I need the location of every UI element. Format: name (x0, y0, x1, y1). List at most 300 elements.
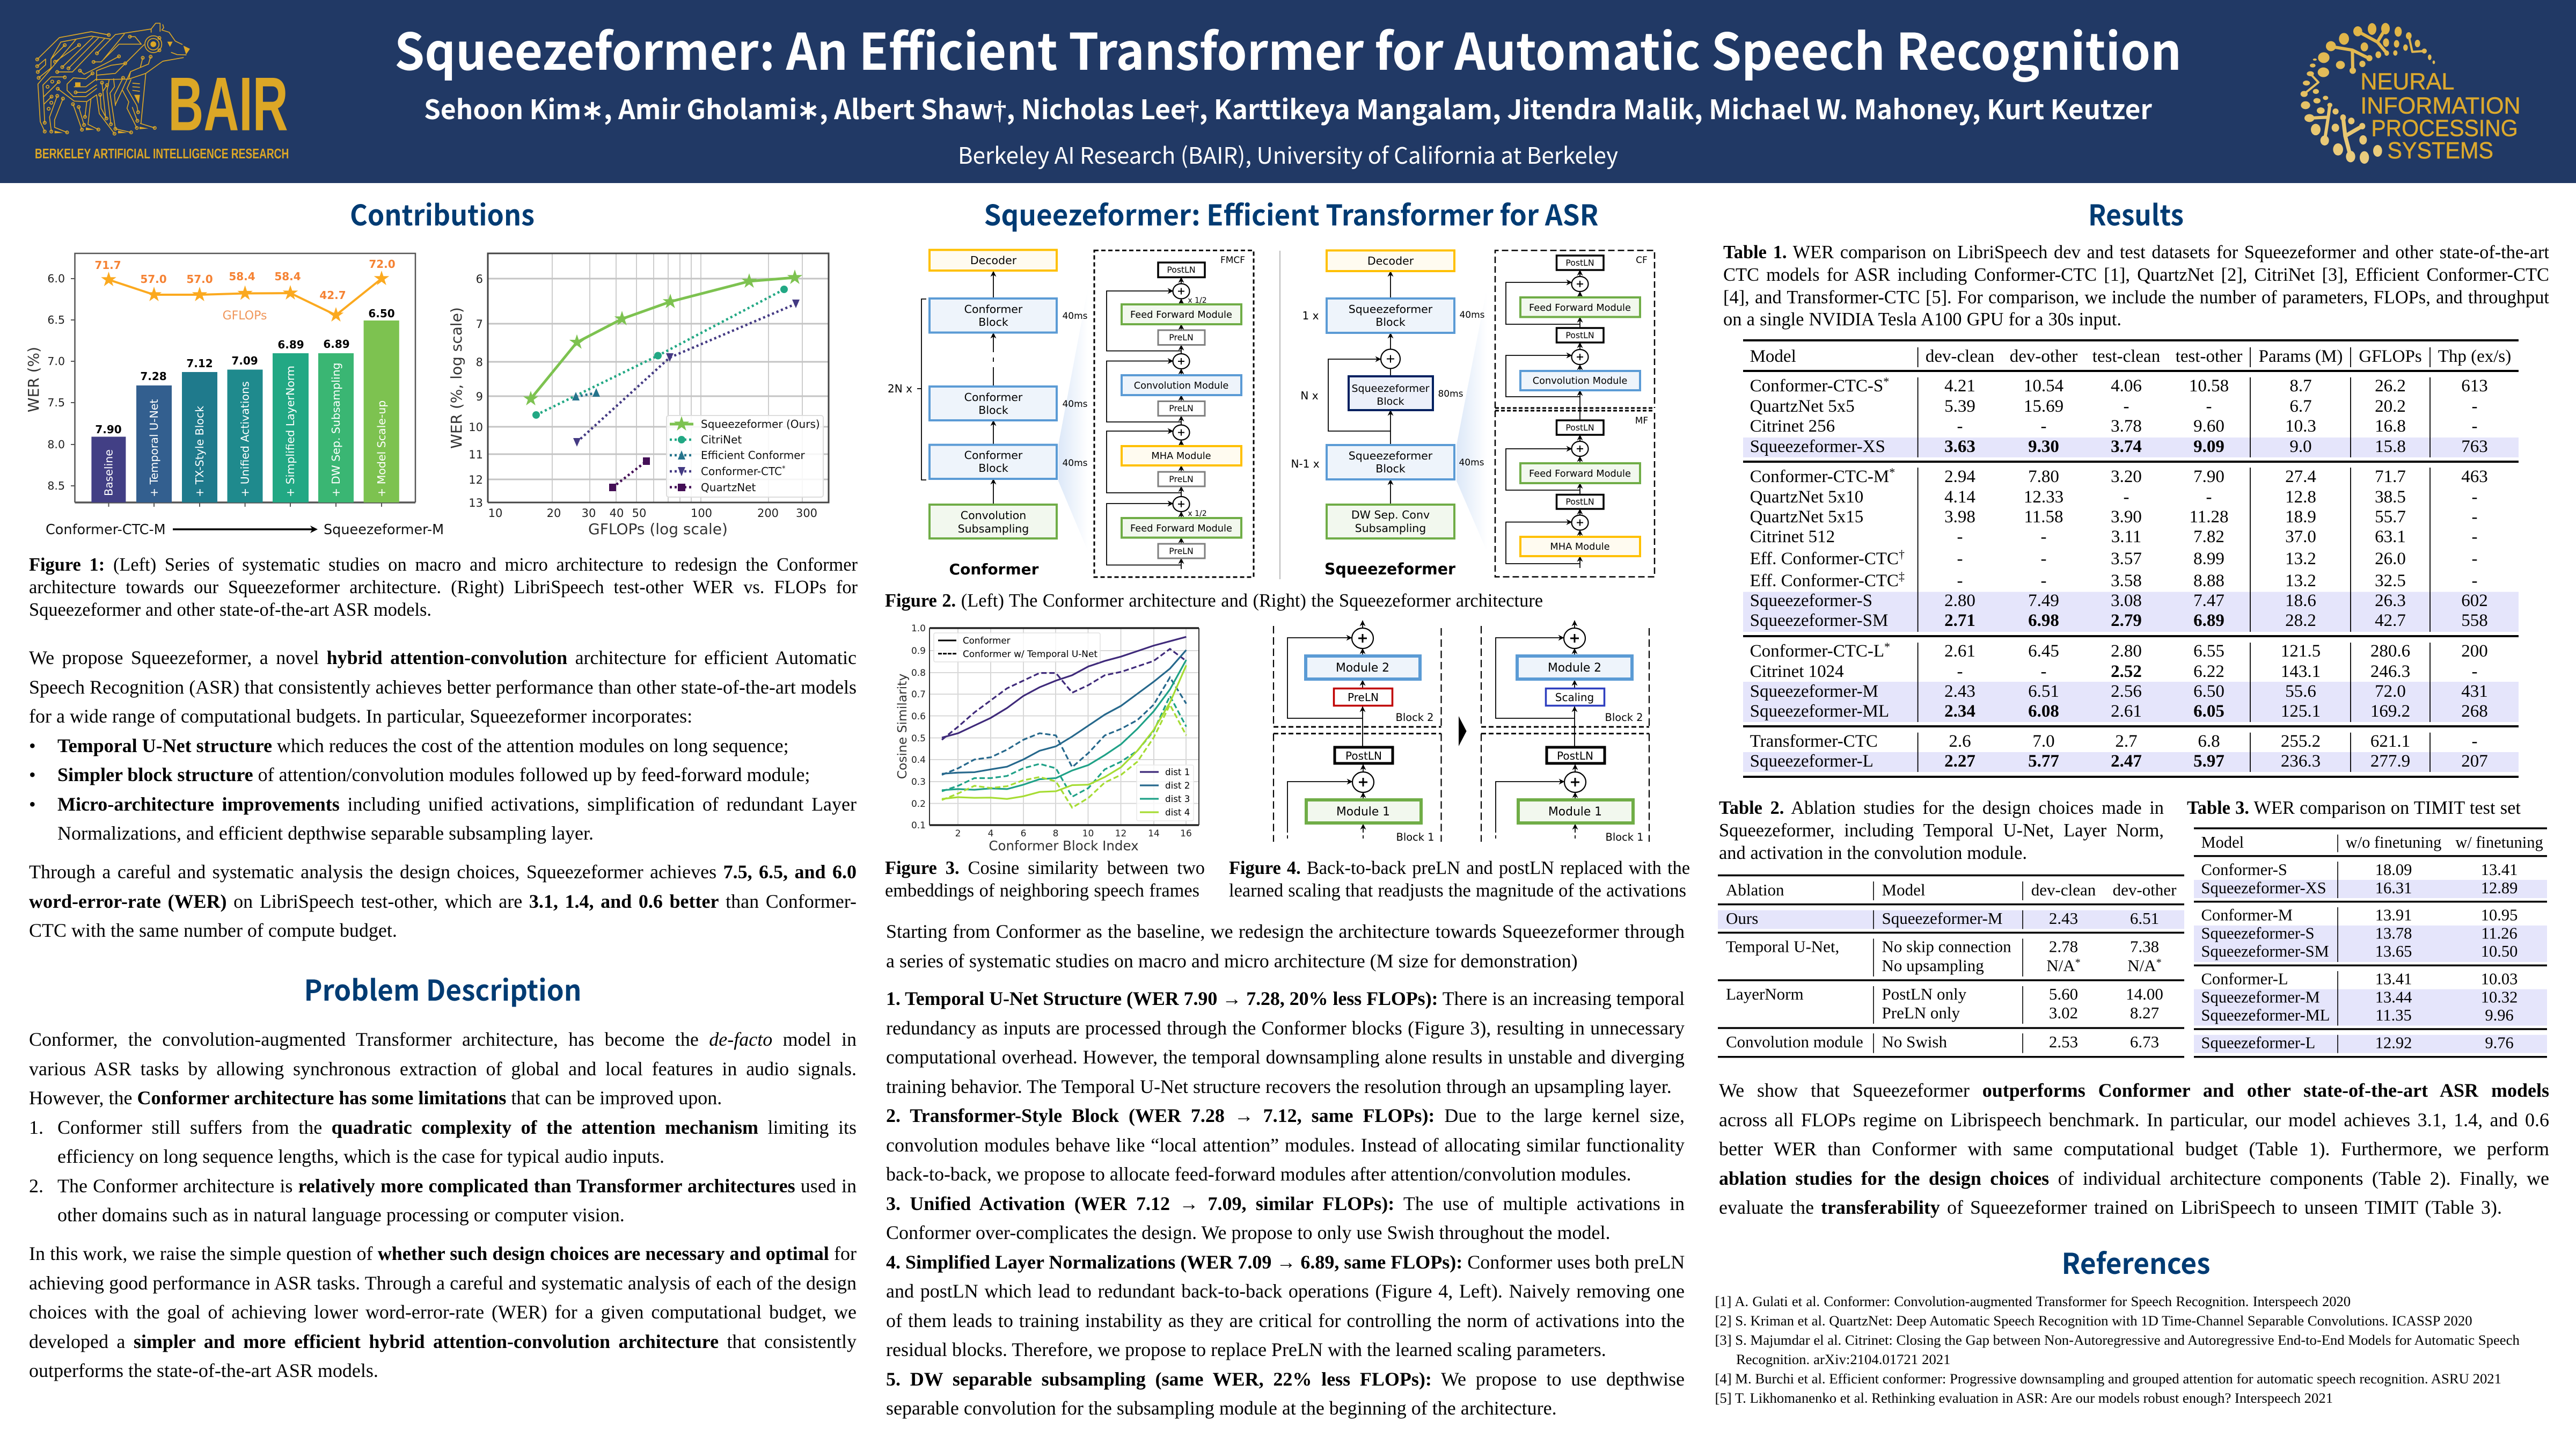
bar chart: systematic studies: 6.5 (47, 314, 65, 326)
table 2 cells: Temporal U-Net, (1726, 937, 1839, 956)
right variant: Scaling (1555, 691, 1594, 704)
table 2 cells: dev-other (2113, 880, 2177, 899)
scatter chart: WER vs GFLOPs: 8 (476, 356, 483, 369)
table 1 section L: Squeezeformer-M (1750, 682, 1878, 701)
figure 1 caption (29, 555, 858, 620)
table 3 cells: 13.78 (2375, 924, 2412, 943)
references list (1715, 1292, 2519, 1408)
text: five design steps: and postLN which lead to redundant back-to-back operations (Figure 4, Left). Naively removing one (886, 1280, 1685, 1302)
text: research question: developed a simpler and more efficient hybrid attention-convolution architecture that consistently (29, 1330, 857, 1352)
outer squeezeformer stack: Block (1377, 396, 1404, 407)
FMCF block detail: x 1/2 (1188, 509, 1207, 518)
transition triangle (1459, 716, 1467, 746)
line chart: cosine similarity: Cosine Similarity (895, 674, 910, 779)
table 3 cells: 10.95 (2481, 906, 2518, 924)
outer conformer stack: 40ms (1062, 458, 1088, 469)
legend: distance (1137, 765, 1194, 821)
table 1 section M: 7.47 (2193, 591, 2224, 610)
scatter chart: WER vs GFLOPs: 300 (796, 507, 817, 520)
table 1 section L: 246.3 (2370, 662, 2410, 681)
logo: BAIR bear (35, 23, 289, 162)
table 1 caption: on a single NVIDIA Tesla A100 GPU for a 30s input. (1723, 309, 2121, 330)
bar chart: systematic studies: 6.89 (277, 338, 304, 351)
line chart: cosine similarity: 0.3 (911, 777, 926, 788)
table 3 cells: w/o finetuning (2346, 833, 2441, 851)
table 1 section M: 6.98 (2028, 611, 2059, 630)
text: proposal and bullets: • (29, 793, 36, 815)
line chart: cosine similarity: 14 (1148, 828, 1160, 839)
table 1 section S: 5.39 (1944, 397, 1975, 416)
table 1 section S: - (2040, 417, 2047, 436)
table 1 section M: 463 (2461, 467, 2488, 486)
table 2 cells: Model (1882, 880, 1925, 899)
table 1 header: GFLOPs (2359, 347, 2422, 366)
table 1 section L: 169.2 (2370, 702, 2410, 721)
text: redesign intro (886, 917, 1685, 975)
table 3 cells: 18.09 (2375, 861, 2412, 879)
text: redesign intro: a series of systematic studies on macro and micro architecture (M size for demonstration) (886, 950, 1578, 972)
outer squeezeformer stack: Squeezeformer (1349, 303, 1433, 316)
FMCF block detail: PreLN (1169, 332, 1194, 342)
table 1 section M: - (1957, 549, 1963, 569)
scatter chart: WER vs GFLOPs: 10 (469, 421, 483, 434)
FMCF block detail: x 1/2 (1188, 296, 1207, 305)
series: QuartzNet (609, 457, 650, 491)
FMCF block detail: PreLN (1169, 474, 1194, 484)
legend: * (782, 465, 786, 473)
legend: Squeezeformer (Ours) (701, 418, 820, 431)
references list: Recognition. arXiv:2104.01721 2021 (1736, 1351, 1950, 1367)
scatter chart: WER vs GFLOPs (448, 252, 830, 538)
table 1 section M: - (2123, 487, 2129, 507)
legend: line style: Conformer w/ Temporal U-Net (963, 648, 1097, 659)
logo: BAIR bear: BAIR (168, 62, 288, 147)
outer squeezeformer stack: 80ms (1438, 389, 1463, 399)
table 1 section L: 431 (2461, 682, 2488, 701)
logo: NeurIPS: SYSTEMS (2387, 137, 2493, 164)
line chart: cosine similarity: 0.7 (911, 689, 926, 700)
table 1 section L: 6.45 (2028, 642, 2059, 661)
table 1 section M: QuartzNet 5x15 (1750, 507, 1863, 527)
table 1 section S (1750, 375, 2488, 456)
figure 3 caption: embeddings of neighboring speech frames (885, 880, 1199, 901)
logo: NeurIPS: PROCESSING (2371, 115, 2518, 141)
table 1 section transformer: 5.77 (2028, 752, 2059, 771)
table 1 section M: 3.98 (1944, 507, 1975, 527)
table 1 section S: 15.69 (2024, 397, 2063, 416)
FMCF block detail: Feed Forward Module (1130, 523, 1232, 534)
right variant (1481, 621, 1649, 843)
table 2 cells: dev-clean (2031, 880, 2096, 899)
table 1 section M: 12.8 (2285, 487, 2316, 507)
table 1 header: dev-other (2010, 347, 2077, 366)
divider between architectures (1279, 251, 1280, 579)
bar chart: systematic studies: WER (%) (25, 347, 42, 412)
legend: line style (934, 633, 1100, 662)
table 1 section transformer: 2.7 (2115, 732, 2138, 751)
table 2 cells: LayerNorm (1726, 985, 1804, 1003)
table 3 cells: 9.96 (2485, 1006, 2514, 1024)
table 1 section transformer (1750, 732, 2488, 771)
table 1 section M: 13.2 (2285, 571, 2316, 591)
text: proposal and bullets: for a wide range of computational budgets. In particular, Squeezeformer incorporates: (29, 705, 692, 727)
table 1 section L: 6.08 (2028, 702, 2059, 721)
table 1 section M: QuartzNet 5x10 (1750, 487, 1863, 507)
table 1 section L: 72.0 (2375, 682, 2406, 701)
table 1 section M: 28.2 (2285, 611, 2316, 630)
text: problem description: Conformer still suffers from the quadratic complexity of the attention mechanism limiting its (57, 1117, 857, 1138)
table 3 cells: 10.32 (2481, 988, 2518, 1006)
heading: Contributions: Contributions (350, 193, 535, 234)
table 1 section M: - (2472, 549, 2477, 569)
bar chart: systematic studies: + Temporal U-Net (148, 399, 160, 497)
table 1 section M: 55.7 (2375, 507, 2406, 527)
right variant: Block 1 (1606, 831, 1643, 843)
table 1 header: test-clean (2092, 347, 2160, 366)
table 1 header: test-other (2176, 347, 2242, 366)
text: WER achievements: word-error-rate (WER) on LibriSpeech test-other, which are 3.1, 1.4, and 0.6 better than Conformer- (29, 890, 857, 912)
text: five design steps: of them leads to training instability as they are critical for controlling the norm of activations into the (886, 1310, 1685, 1331)
table 2 cells: 3.02 (2049, 1003, 2078, 1022)
table 1 header: dev-clean (1926, 347, 1994, 366)
table 2 cells: 5.60 (2049, 985, 2078, 1003)
figure 3 caption: Figure 3. Cosine similarity between two (885, 858, 1205, 878)
table 1 section L (1750, 640, 2488, 721)
outer conformer stack: Block (978, 316, 1008, 329)
table 1 section S: 10.58 (2189, 376, 2229, 396)
table 1 section M: 2.94 (1944, 467, 1975, 486)
outer squeezeformer stack: Squeezeformer (1349, 449, 1433, 462)
table 2 cells: No skip connection (1882, 937, 2011, 956)
legend: distance: dist 4 (1165, 807, 1190, 818)
table 1 section transformer: 2.27 (1944, 752, 1975, 771)
text: WER achievements: Through a careful and systematic analysis the design choices, Squeezeformer achieves 7.5, 6.5, and 6.0 (29, 861, 857, 883)
table 1 section M: 3.20 (2111, 467, 2142, 486)
MF block detail: MF (1635, 416, 1648, 426)
outer squeezeformer stack: 40ms (1459, 457, 1484, 468)
table 1 section transformer: 7.0 (2032, 732, 2055, 751)
references list: [5] T. Likhomanenko et al. Rethinking evaluation in ASR: Are our models robust enough? Interspeech 2021 (1715, 1390, 2333, 1406)
table 1 section M: - (2040, 527, 2047, 546)
table 3 cells (2201, 833, 2543, 1052)
table 1 section transformer: 5.97 (2193, 752, 2224, 771)
left variant: PostLN (1345, 749, 1382, 762)
left variant: PreLN (1348, 691, 1379, 704)
table 1 section M: 18.9 (2285, 507, 2316, 527)
text: five design steps (886, 984, 1685, 1424)
GFLOPs line (101, 271, 389, 322)
table 1 section L: 125.1 (2281, 702, 2321, 721)
legend: distance: dist 2 (1165, 780, 1190, 791)
table 1 section S: * (1883, 375, 1889, 388)
table 1 section M: 12.33 (2024, 487, 2063, 507)
left variant: Module 2 (1336, 661, 1389, 675)
series: CitriNet (532, 286, 788, 419)
table 2 cells: * (2156, 957, 2162, 968)
table 1 section S: 10.3 (2285, 417, 2316, 436)
table 1 section transformer: 236.3 (2281, 752, 2321, 771)
scatter chart: WER vs GFLOPs: GFLOPs (log scale) (588, 520, 728, 538)
table 2 cells: 8.27 (2130, 1003, 2159, 1022)
table 1 section L: 121.5 (2281, 642, 2321, 661)
line chart: cosine similarity: Conformer Block Index (989, 838, 1139, 854)
text: proposal and bullets: • (29, 764, 36, 785)
bar chart: systematic studies: 7.90 (95, 423, 122, 436)
table 1 section M: 3.57 (2111, 549, 2142, 569)
bar chart: systematic studies: + Unified Activations (239, 381, 252, 497)
table 1 section M: 63.1 (2375, 527, 2406, 546)
text: results summary (1719, 1076, 2549, 1222)
line chart: cosine similarity: 0.8 (911, 668, 926, 679)
table 1 section transformer: 6.8 (2198, 732, 2220, 751)
table 1 section M: - (2040, 549, 2047, 569)
table 3 cells: Conformer-M (2201, 906, 2293, 924)
outer squeezeformer stack: DW Sep. Conv (1351, 508, 1430, 521)
references list: [2] S. Kriman et al. QuartzNet: Deep Automatic Speech Recognition with 1D Time-Channel Separable Convolutions. ICASSP 2020 (1715, 1313, 2472, 1329)
references list: [4] M. Burchi et al. Efficient conformer: Progressive downsampling and grouped attention for automatic speech recognition. ASRU 2021 (1715, 1371, 2501, 1387)
outer conformer stack: 40ms (1062, 311, 1088, 322)
table 1 section S: Conformer-CTC-S (1750, 376, 1883, 396)
table 1 section M: Squeezeformer-S (1750, 591, 1872, 610)
table 1 section M: 71.7 (2375, 467, 2406, 486)
FMCF block detail: PreLN (1169, 403, 1194, 413)
table 2 cells: Convolution module (1726, 1032, 1863, 1051)
CF block detail: Convolution Module (1533, 375, 1627, 387)
table 1 section M: - (2472, 571, 2477, 591)
legend: distance: dist 1 (1165, 767, 1190, 777)
table 2 cells: No Swish (1882, 1032, 1947, 1051)
table 3 cells: 11.26 (2481, 924, 2518, 943)
table 1 section S: 16.8 (2375, 417, 2406, 436)
table 1 section M: 2.80 (1944, 591, 1975, 610)
table 1: WER comparison (1739, 336, 2522, 781)
table 1 section L: Conformer-CTC-L (1750, 642, 1884, 661)
table 1 section transformer: 2.47 (2111, 752, 2142, 771)
figure 4 caption: Figure 4. Back-to-back preLN and postLN replaced with the (1229, 858, 1690, 878)
table 1 section M: Eff. Conformer-CTC (1750, 571, 1899, 591)
outer squeezeformer stack: Squeezeformer (1324, 560, 1456, 578)
FMCF block detail: MHA Module (1151, 450, 1211, 462)
outer conformer stack: Conformer (964, 391, 1023, 404)
table 1 section transformer: 621.1 (2370, 732, 2410, 751)
outer conformer stack: Decoder (970, 254, 1017, 267)
table 3 cells: Squeezeformer-XS (2201, 879, 2326, 897)
table 1 section M: 602 (2461, 591, 2488, 610)
table 1 section M: 3.11 (2111, 527, 2141, 546)
line chart: cosine similarity: 10 (1082, 828, 1094, 839)
table 1 section transformer: 207 (2461, 752, 2488, 771)
table 1 section M: 7.80 (2028, 467, 2059, 486)
bars (91, 320, 399, 502)
table 1 section M: 2.71 (1944, 611, 1975, 630)
table 1 section S: - (2123, 397, 2129, 416)
table 1 header (1750, 347, 2511, 366)
logo: NeurIPS: NEURAL (2360, 69, 2454, 95)
scatter chart: WER vs GFLOPs: 40 (610, 507, 624, 520)
header banner (0, 0, 2576, 183)
MF block detail: Feed Forward Module (1529, 468, 1631, 479)
table 1 section S: - (1957, 417, 1963, 436)
text: problem description: Conformer, the convolution-augmented Transformer architecture, has become the de-facto model in (29, 1029, 857, 1050)
heading: Squeezeformer section: Squeezeformer: Efficient Transformer for ASR (984, 193, 1598, 234)
legend: Conformer-CTC (701, 465, 782, 478)
table 1 section S: 3.78 (2111, 417, 2142, 436)
text: results summary: We show that Squeezeformer outperforms Conformer and other state-of-the-art ASR models (1719, 1080, 2549, 1101)
table 1 section M: 42.7 (2375, 611, 2406, 630)
table 1 section M: 11.28 (2189, 507, 2229, 527)
legend: line style: Conformer (963, 635, 1011, 646)
outer conformer stack: 40ms (1062, 399, 1088, 410)
CF block detail: PostLN (1565, 330, 1594, 340)
table 1 section M: 32.5 (2375, 571, 2406, 591)
bar chart: systematic studies (25, 252, 444, 538)
line chart: cosine similarity: 1.0 (911, 623, 926, 634)
table 1 section M: - (2206, 487, 2212, 507)
bar chart: systematic studies: 57.0 (186, 273, 213, 286)
table 3 cells: 13.41 (2375, 970, 2412, 988)
text: problem description: The Conformer architecture is relatively more complicated than Transformer architectures used in (57, 1175, 857, 1196)
table 1 section S: 3.63 (1944, 437, 1975, 456)
table 2 cells: Ours (1726, 909, 1758, 928)
table 1 section S: 3.74 (2111, 437, 2142, 456)
bar chart: systematic studies: 6.89 (323, 338, 350, 351)
line chart: cosine similarity: 4 (988, 828, 993, 839)
text: redesign intro: Starting from Conformer as the baseline, we redesign the architecture towards Squeezeformer through (886, 921, 1685, 942)
text: five design steps: 1. Temporal U-Net Structure (WER 7.90 → 7.28, 20% less FLOPs): There is an increasing temporal (886, 988, 1685, 1009)
bar chart: systematic studies: + Model Scale-up (375, 400, 388, 497)
line chart: cosine similarity: 0.9 (911, 646, 926, 657)
bar chart: systematic studies: 7.5 (47, 396, 65, 409)
FMCF block detail: FMCF (1220, 255, 1245, 266)
text: proposal and bullets: • (29, 734, 36, 756)
text: results summary: ablation studies for the design choices of individual architecture components (Table 2). Finally, we (1719, 1167, 2549, 1189)
line chart: cosine similarity: 0.6 (911, 711, 926, 722)
table 2 cells: PreLN only (1882, 1003, 1960, 1022)
text: five design steps: redundancy as inputs are processed through the Conformer blocks (Figure 3), resulting in unnecessary (886, 1017, 1685, 1038)
table 3 cells: 10.03 (2481, 970, 2518, 988)
table 1 section transformer: 277.9 (2370, 752, 2410, 771)
bar chart: systematic studies: 57.0 (140, 273, 167, 286)
scatter chart: WER vs GFLOPs: 30 (582, 507, 596, 520)
right variant: PostLN (1557, 749, 1593, 762)
table 1 section S: - (2472, 397, 2477, 416)
text: research question: achieving good performance in ASR tasks. Through a careful and systematic analysis of each of the design (29, 1272, 857, 1294)
authors: Sehoon Kim∗, Amir Gholami∗, Albert Shaw†, Nicholas Lee†, Karttikeya Mangalam, Jitendra Malik, Michael W. Mahoney, Kurt Keutzer (424, 89, 2152, 127)
table 3 cells: 13.91 (2375, 906, 2412, 924)
bar chart: systematic studies: 6.50 (368, 307, 395, 320)
table 3 cells: Squeezeformer-SM (2201, 942, 2329, 960)
table 1 section M: 38.5 (2375, 487, 2406, 507)
table 1 section M (1750, 465, 2488, 630)
bar chart: systematic studies: 58.4 (274, 270, 301, 283)
CF block detail: CF (1636, 255, 1648, 266)
table 1 section M: 37.0 (2285, 527, 2316, 546)
text: proposal and bullets: Simpler block structure of attention/convolution modules followed up by feed-forward module; (57, 764, 810, 785)
table 1 section transformer: - (2472, 732, 2477, 751)
heading: Problem Description: Problem Description (304, 968, 582, 1009)
logo: NeurIPS (2300, 23, 2521, 164)
heading: References: References (2062, 1242, 2210, 1282)
bar chart: systematic studies: + Simplified LayerNorm (284, 366, 297, 497)
table 2: ablation studies (1715, 870, 2190, 1060)
table 1 section M: Citrinet 512 (1750, 527, 1835, 546)
FMCF block detail (1094, 250, 1254, 577)
table 1 section transformer: Squeezeformer-L (1750, 752, 1874, 771)
FMCF block detail: PreLN (1169, 546, 1194, 556)
table 1 section L: 2.52 (2111, 662, 2142, 681)
scatter chart: WER vs GFLOPs: 20 (547, 507, 561, 520)
axis caption arrow (46, 522, 444, 538)
table 3 cells: 16.31 (2375, 879, 2412, 897)
outer squeezeformer stack: 1 x (1302, 309, 1319, 322)
text: five design steps: back-to-back, we propose to allocate feed-forward modules after attention/convolution modules. (886, 1163, 1631, 1185)
table 2 cells: Squeezeformer-M (1882, 909, 2002, 928)
table 1 section M: * (1889, 465, 1895, 479)
scatter chart: WER vs GFLOPs: 11 (469, 448, 483, 461)
bar chart: systematic studies: + DW Sep. Subsampling (330, 362, 342, 497)
diagram: Squeezeformer architecture (1291, 249, 1655, 578)
text: five design steps: Conformer over-complicates the design. We propose to only use Swish throughout the model. (886, 1222, 1610, 1243)
table 1 section M: 3.08 (2111, 591, 2142, 610)
table 1 section S: 10.54 (2024, 376, 2063, 396)
logo: BAIR bear: BERKELEY ARTIFICIAL INTELLIGENCE RESEARCH (35, 145, 289, 162)
table 1 section S: 4.21 (1944, 376, 1975, 396)
outer conformer stack: Convolution (961, 509, 1026, 522)
FMCF block detail: Feed Forward Module (1130, 309, 1232, 320)
table 3 cells: Conformer-L (2201, 970, 2288, 988)
figure 2 caption: Figure 2. (Left) The Conformer architecture and (Right) the Squeezeformer architecture (885, 591, 1543, 611)
table 1 section M: 8.88 (2193, 571, 2224, 591)
outer squeezeformer stack: Decoder (1367, 254, 1414, 267)
left variant (1274, 621, 1441, 843)
table 1 section L: - (2040, 662, 2047, 681)
legend (667, 416, 823, 497)
line chart: cosine similarity: 2 (955, 828, 961, 839)
text: WER achievements (29, 861, 857, 941)
CF block detail (1495, 250, 1655, 420)
scatter chart: WER vs GFLOPs: 7 (476, 318, 483, 331)
table 2 cells: 14.00 (2126, 985, 2163, 1003)
text: proposal and bullets: We propose Squeezeformer, a novel hybrid attention-convolution architecture for efficient Automatic (29, 647, 857, 668)
table 3 cells: 12.89 (2481, 879, 2518, 897)
references list: [1] A. Gulati et al. Conformer: Convolution-augmented Transformer for Speech Recognition. Interspeech 2020 (1715, 1293, 2351, 1309)
outer conformer stack: Conformer (949, 560, 1039, 578)
table 1 section L: 6.55 (2193, 642, 2224, 661)
bar chart: systematic studies: 58.4 (229, 270, 255, 283)
line chart: cosine similarity: 0.2 (911, 799, 926, 810)
table 1 section L: 200 (2461, 642, 2488, 661)
line chart: cosine similarity (891, 623, 1208, 854)
affiliation: Berkeley AI Research (BAIR), University of California at Berkeley (958, 138, 1618, 171)
MF block detail: MHA Module (1550, 541, 1610, 552)
text: five design steps: 5. DW separable subsampling (same WER, 22% less FLOPs): We propose to use depthwise (886, 1368, 1685, 1389)
table 3 cells: Squeezeformer-L (2201, 1034, 2315, 1052)
text: problem description: 1. (29, 1117, 43, 1138)
legend: CitriNet (701, 433, 742, 446)
text: research question: outperforms the state-of-the-art ASR models. (29, 1360, 378, 1381)
text: five design steps: training behavior. The Temporal U-Net structure recovers the resolution through an upsampling layer. (886, 1076, 1672, 1097)
text: problem description: other domains such as in natural language processing or computer vision. (57, 1204, 625, 1226)
table 1 section L: 2.61 (1944, 642, 1975, 661)
table 1 header: Thp (ex/s) (2438, 347, 2511, 366)
text: results summary: across all FLOPs regime on Librispeech benchmark. In particular, our model achieves 3.1, 1.4, and 0.6 (1719, 1109, 2549, 1131)
outer conformer stack (888, 250, 1088, 578)
table 1 section M: 27.4 (2285, 467, 2316, 486)
table 2 cells: 6.73 (2130, 1032, 2159, 1051)
table 1 section L: 6.51 (2028, 682, 2059, 701)
outer conformer stack: Subsampling (958, 522, 1029, 535)
table 1 section M: Eff. Conformer-CTC (1750, 549, 1899, 569)
